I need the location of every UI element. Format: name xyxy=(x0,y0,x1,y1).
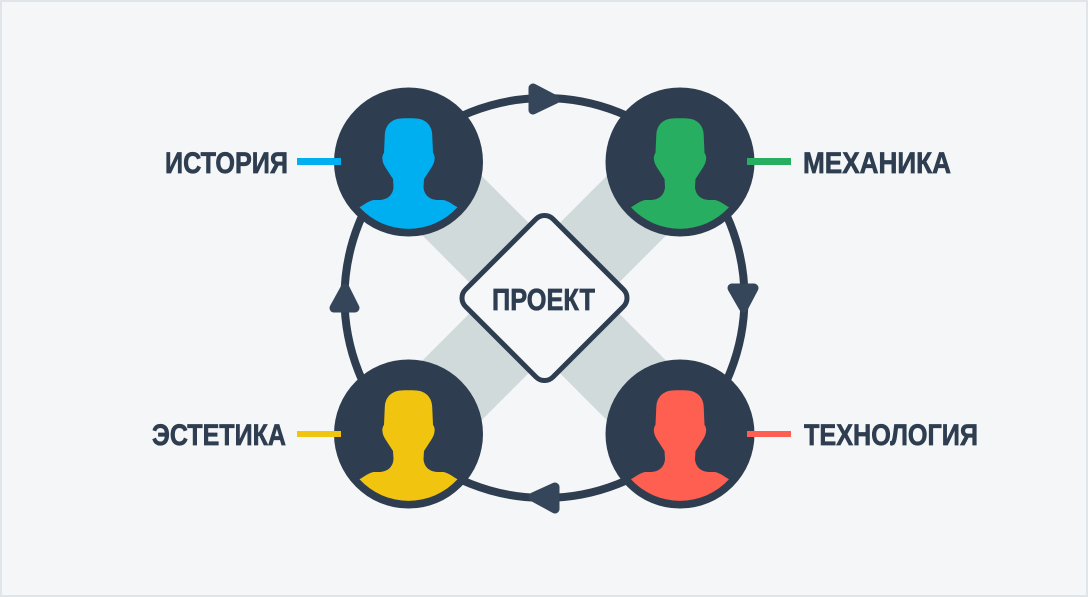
node: технология xyxy=(606,360,978,508)
arrow: right xyxy=(732,288,754,308)
node: механика: МЕХАНИКА xyxy=(803,147,951,180)
arrow: left xyxy=(334,288,355,308)
arrow: bottom xyxy=(533,487,555,509)
node: эстетика xyxy=(152,360,483,508)
node: эстетика: ЭСТЕТИКА xyxy=(152,419,286,452)
diagonal band: механика to эстетика xyxy=(408,162,680,434)
node: история xyxy=(165,88,483,236)
center diamond: проект xyxy=(457,211,632,385)
arrow: top xyxy=(533,88,555,110)
cycle ring xyxy=(344,98,744,498)
node: история: ИСТОРИЯ xyxy=(165,147,288,180)
center diamond: проект: ПРОЕКТ xyxy=(492,282,595,317)
node: механика xyxy=(606,88,951,236)
diagonal band: история to технология xyxy=(408,162,680,434)
node: технология: ТЕХНОЛОГИЯ xyxy=(804,419,978,452)
